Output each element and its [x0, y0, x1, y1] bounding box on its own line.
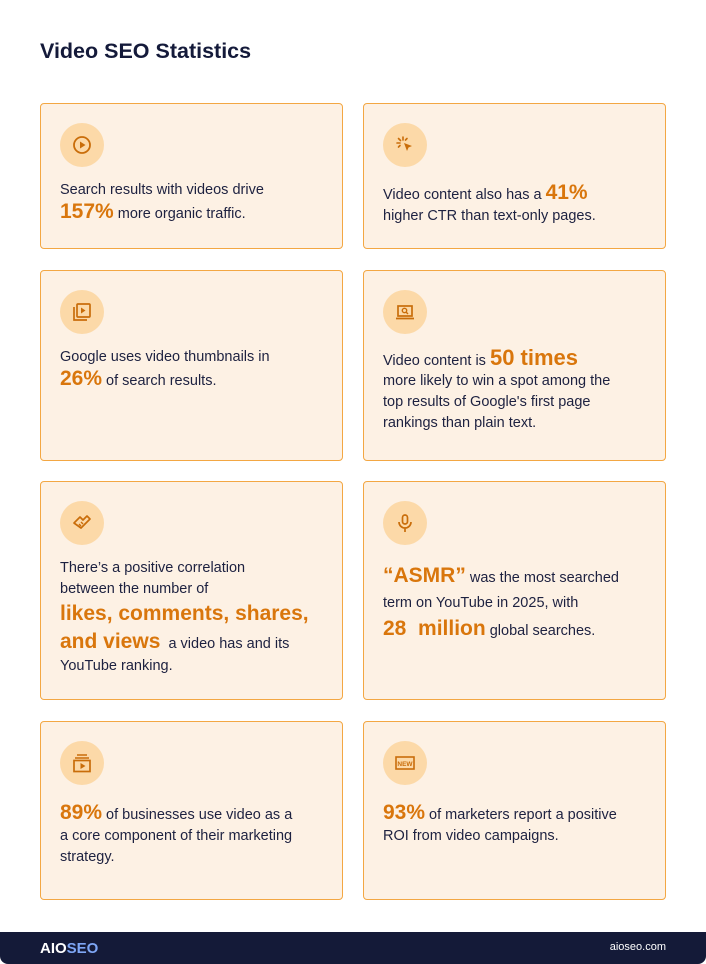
text: 93% of marketers report a positive — [383, 801, 617, 824]
text — [60, 182, 264, 223]
text: Search results with videos drive — [60, 182, 264, 198]
panel: organic traffic — [40, 103, 343, 249]
icon: microphone — [383, 501, 427, 545]
url: aioseo.com — [610, 941, 666, 953]
text: term on YouTube in 2025, with — [383, 595, 578, 611]
icon: handshake — [60, 501, 104, 545]
text: higher CTR than text-only pages. — [383, 208, 596, 224]
text: 157% more organic traffic. — [60, 200, 246, 223]
text: strategy. — [60, 849, 115, 865]
icon: new badge: NEW — [397, 761, 413, 768]
text: more likely to win a spot among the — [383, 373, 610, 389]
text: Video content also has a 41% — [383, 181, 588, 204]
icon: play — [60, 123, 104, 167]
text — [60, 349, 270, 390]
title: Video SEO Statistics — [40, 39, 251, 63]
text: 89% of businesses use video as a — [60, 801, 292, 824]
text: ROI from video campaigns. — [383, 828, 559, 844]
text — [60, 801, 292, 865]
icon: cursor click — [383, 123, 427, 167]
panel: CTR — [363, 103, 666, 249]
text — [383, 181, 596, 224]
icon: video library — [60, 290, 104, 334]
text — [60, 560, 309, 674]
footer — [0, 932, 706, 964]
panel: 50 times — [363, 270, 666, 461]
text: Google uses video thumbnails in — [60, 349, 270, 365]
text: rankings than plain text. — [383, 415, 536, 431]
icon: laptop search — [383, 290, 427, 334]
text: a core component of their marketing — [60, 828, 292, 844]
icon: video stack — [60, 741, 104, 785]
panel: businesses — [40, 721, 343, 900]
text: between the number of — [60, 581, 208, 597]
logo: AIOSEO — [40, 940, 98, 957]
text: “ASMR” was the most searched — [383, 564, 619, 587]
icon: new badge — [383, 741, 427, 785]
text: likes, comments, shares, — [60, 602, 309, 625]
panel: ROI — [363, 721, 666, 900]
text: Video content is 50 times — [383, 345, 578, 370]
text: 28 million global searches. — [383, 617, 595, 640]
text: 26% of search results. — [60, 367, 216, 390]
text: There’s a positive correlation — [60, 560, 245, 576]
text — [383, 801, 617, 844]
panel: engagement — [40, 481, 343, 700]
text — [383, 345, 610, 431]
text: YouTube ranking. — [60, 658, 173, 674]
text: top results of Google's first page — [383, 394, 590, 410]
panel: thumbnails — [40, 270, 343, 461]
text — [383, 564, 619, 640]
text: and views a video has and its — [60, 630, 289, 653]
panel: ASMR — [363, 481, 666, 700]
